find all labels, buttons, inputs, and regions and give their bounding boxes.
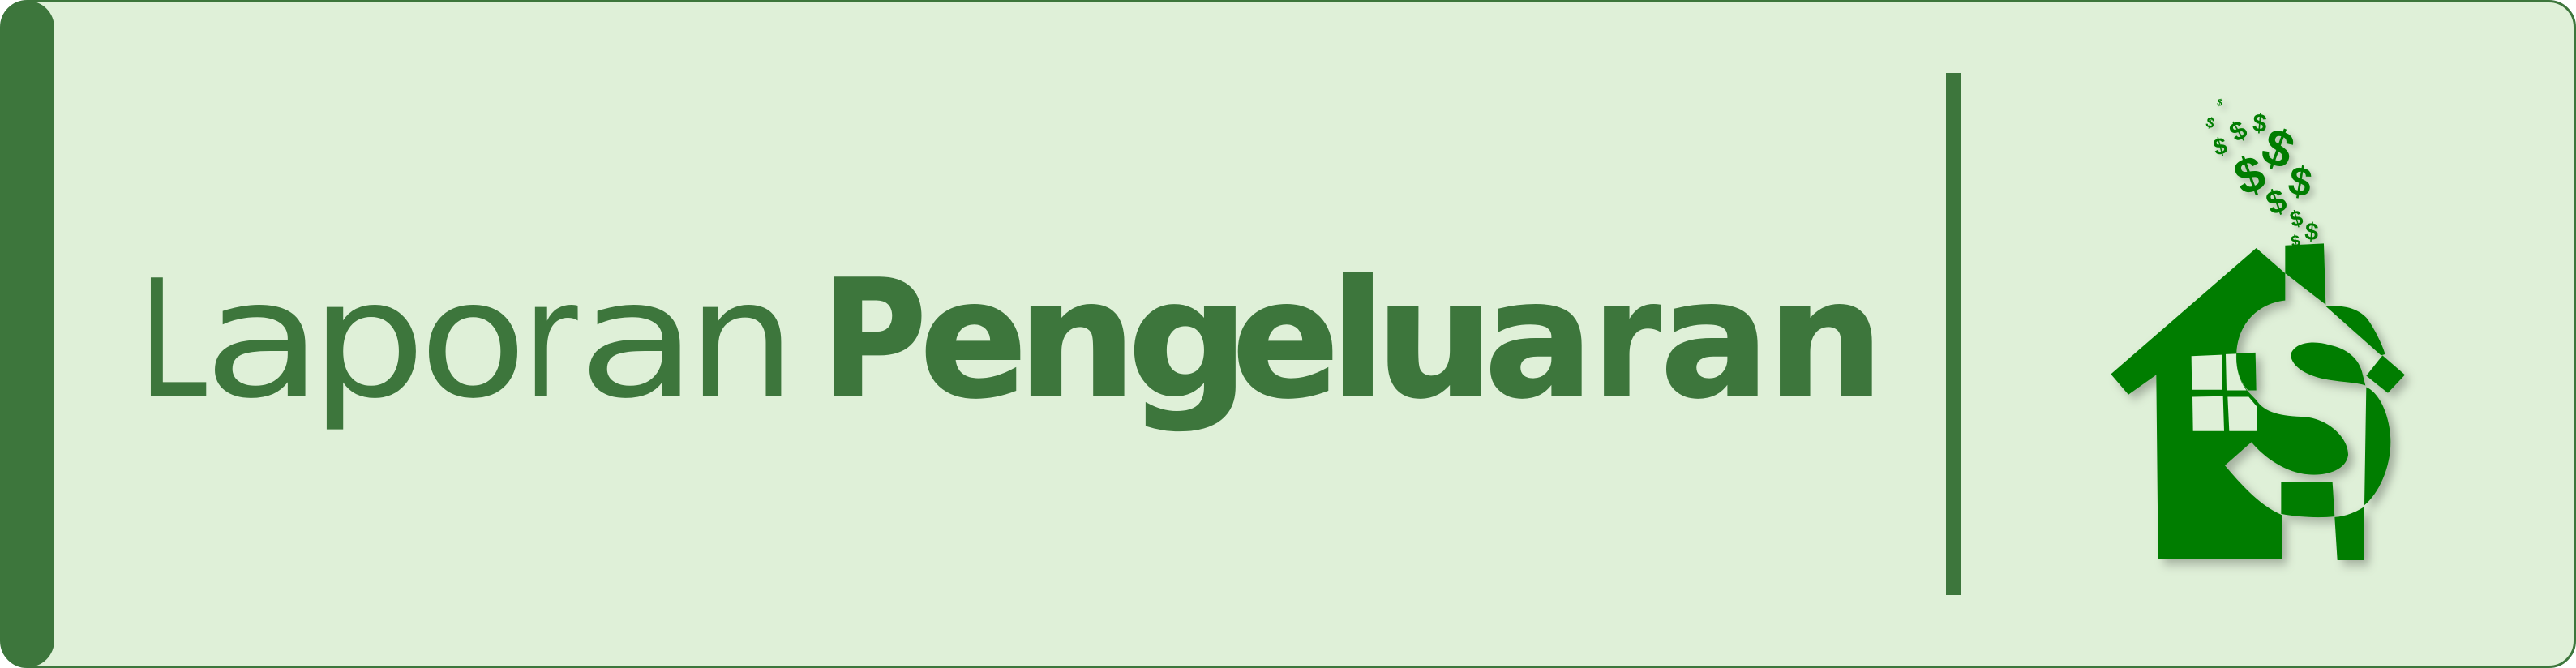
right house leg	[2334, 507, 2364, 560]
title word: Laporan: r	[523, 246, 578, 435]
vertical divider	[1946, 73, 1961, 595]
title word: Laporan: n	[688, 246, 795, 435]
title word: Pengeluaran: u	[1375, 246, 1494, 435]
icon: dollar signs rising from chimney	[2204, 96, 2320, 251]
icon: dollar signs rising from chimney: $	[2210, 133, 2230, 161]
icon: dollar signs rising from chimney: $	[2216, 96, 2224, 109]
title word: Pengeluaran: a	[1484, 246, 1593, 435]
title word: Pengeluaran: l	[1330, 246, 1386, 435]
icon: dollar signs rising from chimney: $	[2227, 144, 2273, 207]
title word: Laporan: a	[577, 246, 697, 435]
icon: dollar signs rising from chimney: $	[2304, 218, 2320, 246]
icon: window panes	[2192, 353, 2257, 431]
dollar upper blob	[2291, 343, 2365, 386]
roof corner	[2366, 355, 2405, 393]
dollar bottom piece	[2281, 482, 2334, 517]
icon: dollar signs rising from chimney: $	[2287, 205, 2305, 232]
title word: Pengeluaran: e	[1232, 246, 1339, 435]
title word: Laporan: a	[203, 246, 323, 435]
icon: dollar signs rising from chimney: $	[2290, 232, 2302, 251]
title word: Laporan: p	[310, 246, 426, 435]
icon: dollar signs rising from chimney: $	[2255, 116, 2302, 181]
title word: Pengeluaran: P	[821, 246, 927, 435]
title word: Pengeluaran: g	[1127, 246, 1249, 435]
dollar right curve	[2364, 388, 2390, 505]
left accent bar	[1, 1, 54, 667]
icon: dollar signs rising from chimney: $	[2224, 114, 2252, 148]
title word: Laporan: o	[419, 246, 527, 435]
window upper-right piece	[2236, 353, 2257, 391]
icon: dollar signs rising from chimney: $	[2261, 181, 2291, 222]
icon: house shape	[2111, 243, 2405, 560]
icon: dollar signs rising from chimney: $	[2204, 114, 2216, 131]
house body with dollar curve	[2111, 248, 2348, 559]
title word: Laporan: L	[139, 246, 207, 435]
title word: Pengeluaran: n	[1018, 246, 1137, 435]
roof right	[2325, 306, 2385, 355]
title word: Pengeluaran: n	[1767, 246, 1884, 435]
icon: dollar signs rising from chimney: $	[2285, 157, 2316, 206]
title word: Pengeluaran: r	[1593, 246, 1661, 435]
title: Laporan Pengeluaran	[139, 246, 1884, 435]
title word: Pengeluaran: e	[919, 246, 1027, 435]
icon: house with dollar sign and dollar smoke	[2111, 96, 2405, 560]
title word: Pengeluaran: a	[1660, 246, 1769, 435]
icon: dollar signs rising from chimney: $	[2252, 108, 2268, 138]
chimney	[2285, 243, 2325, 305]
